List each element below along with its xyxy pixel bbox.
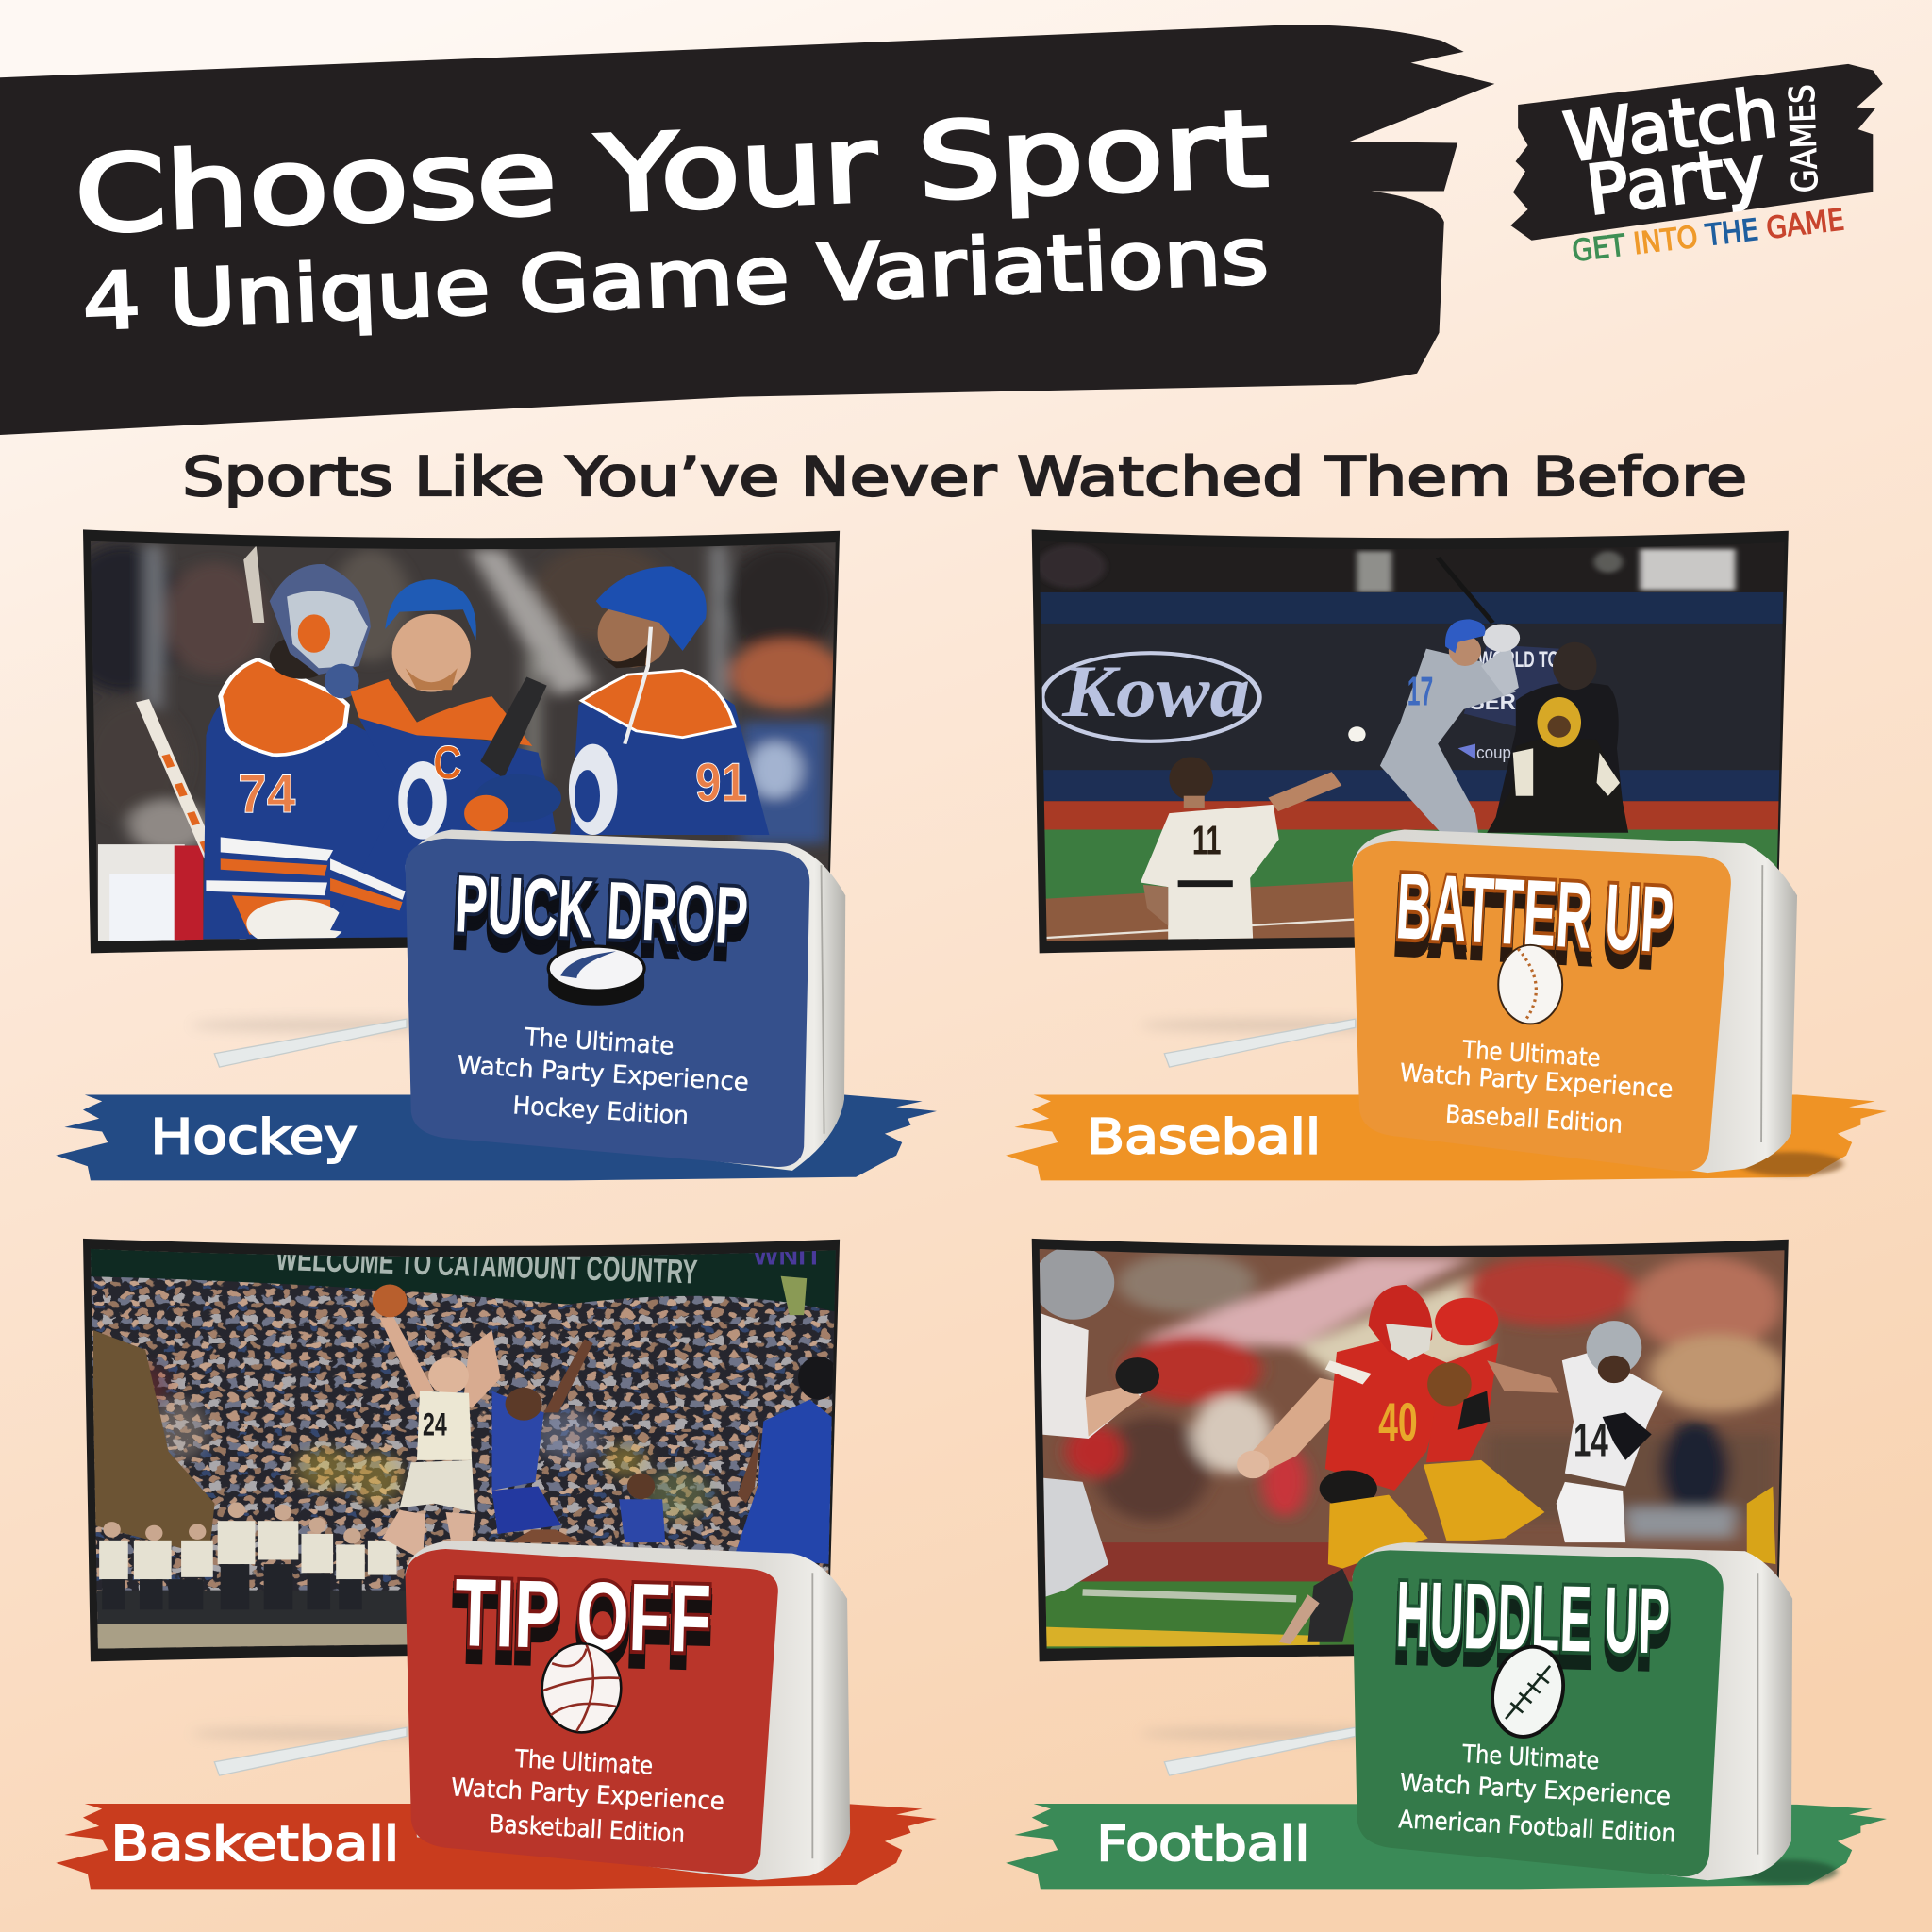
subtitle: Sports Like You’ve Never Watched Them Before [182,445,1747,508]
title line 2: 4 Unique Game Variations [81,211,1270,348]
Kowa sign [1042,653,1259,741]
panel: baseball [1006,529,1887,1180]
monitor with baseball photo: coup [1476,742,1511,762]
monitor stand [1140,1727,1424,1775]
ribbon: baseball [1006,1094,1887,1180]
second red player [1426,1343,1498,1462]
tin title: Puck Drop: PUCK DROP [453,858,750,962]
logo: Watch Party Games [1510,64,1883,269]
panel: hockey [56,529,937,1180]
tin: Tip Off [406,1541,850,1880]
monitor with baseball photo: SER [1470,690,1516,714]
logo: Watch Party Games: Party [1582,130,1770,230]
tin text: basketball: The Ultimate [513,1745,654,1781]
ribbon: basketball: Basketball [111,1817,399,1873]
tin title: Tip Off [453,1558,712,1686]
tin title: Tip Off: TIP OFF [453,1565,712,1679]
monitor with hockey photo [58,529,856,957]
monitor with baseball photo: Kowa [1061,650,1250,732]
Vermont player [373,1285,407,1317]
logo: Watch Party Games: GAMES [1782,84,1826,193]
tin text: baseball: The Ultimate [1461,1036,1601,1073]
tin: Huddle Up [1353,1542,1838,1884]
tin text: football: Watch Party Experience [1399,1769,1672,1811]
tin text: baseball: Baseball Edition [1444,1100,1624,1140]
tin text: basketball: Watch Party Experience [450,1774,725,1816]
right player [1562,1352,1663,1486]
monitor with baseball photo [1024,529,1805,953]
panel: football [1006,1239,1887,1889]
catcher [1487,800,1628,833]
logo: Watch Party Games: Watch [1559,73,1782,177]
center runner [1244,1378,1359,1474]
tin title: Huddle Up: HUDDLE UP [1394,1569,1671,1680]
tin title: Huddle Up: HUDDLE UP [1394,1575,1671,1688]
pitcher [1274,778,1337,805]
tin: Puck Drop [406,830,845,1171]
monitor with basketball photo: WELCOME TO CATAMOUNT COUNTRY [275,1240,698,1291]
tin text: hockey: Watch Party Experience [457,1051,750,1097]
goal net [98,844,185,941]
player 4 [619,1499,665,1542]
tin text: basketball [450,1745,725,1849]
tin title: Puck Drop [453,858,750,975]
tin: Batter Up [1353,830,1843,1176]
monitor with baseball photo: 11 [1192,817,1222,863]
ribbon: football: Football [1096,1817,1309,1873]
series sign [1464,644,1559,726]
monitor with baseball photo: 17 [1407,667,1433,714]
tin title: Huddle Up [1394,1562,1671,1688]
tin text: football: American Football Edition [1398,1806,1676,1849]
icon: football [1483,1639,1573,1744]
monitor with hockey photo: 91 [695,753,747,813]
logo: Watch Party Games: GET INTO THE GAME [1571,203,1846,269]
tin title: Batter Up: BATTER UP [1393,868,1675,987]
ribbon: basketball [56,1804,937,1889]
monitor stand [191,1019,475,1067]
left lineman [1040,1313,1152,1439]
goalie [203,706,406,940]
right player [570,697,770,835]
ribbon: football [1006,1804,1887,1889]
monitor with football photo: 40 [1378,1392,1418,1453]
monitor with hockey photo: C [433,736,462,789]
pitched ball [1348,726,1366,742]
tin text: basketball: Basketball Edition [489,1810,686,1849]
batter [1438,558,1492,623]
tin title: Tip Off: TIP OFF [453,1572,712,1686]
tin text: hockey [457,1024,750,1131]
title line 1: Choose Your Sport [73,89,1271,258]
ribbon: hockey [56,1094,937,1180]
monitor with football photo [1024,1239,1805,1664]
bench players [99,1521,396,1579]
tin text: baseball: Watch Party Experience [1399,1059,1674,1104]
tin text: football: The Ultimate [1461,1740,1600,1775]
monitor with basketball photo: WNIT [753,1241,823,1270]
monitor with basketball photo: 24 [423,1406,447,1442]
monitor with basketball photo [58,1235,868,1668]
stick and gloves [480,676,547,778]
goalie stick [142,701,246,939]
tin title: Puck Drop: PUCK DROP [453,865,750,968]
tin text: baseball [1399,1036,1674,1140]
monitor with baseball photo: WORLD TO [1478,647,1559,672]
panel: basketball [56,1235,937,1889]
foreground player [735,1400,832,1564]
monitor with football photo: 14 [1574,1412,1608,1466]
captain [330,718,556,939]
tin text: hockey: Hockey Edition [512,1091,690,1131]
icon: puck [548,946,644,1006]
tin title: Batter Up [1393,854,1676,987]
tin text: football [1398,1740,1676,1849]
icon: baseball [1498,945,1562,1024]
ribbon: hockey: Hockey [150,1110,358,1166]
icon: basketball [542,1643,621,1732]
far right player [1747,1486,1775,1564]
umpire [1496,683,1623,817]
monitor stand [191,1727,475,1775]
title banner [0,25,1494,435]
tin text: hockey: The Ultimate [524,1024,675,1061]
ribbon: baseball: Baseball [1087,1110,1321,1166]
tin title: Tip Off: TIP OFF [454,1558,712,1673]
tin title: Huddle Up: HUDDLE UP [1394,1562,1671,1674]
tin title: Batter Up: BATTER UP [1393,854,1676,973]
tin title: Puck Drop: PUCK DROP [453,873,749,975]
monitor stand [1140,1019,1424,1067]
tin title: Batter Up: BATTER UP [1393,860,1675,979]
monitor with hockey photo: 74 [238,764,296,824]
blue defender [492,1391,544,1491]
